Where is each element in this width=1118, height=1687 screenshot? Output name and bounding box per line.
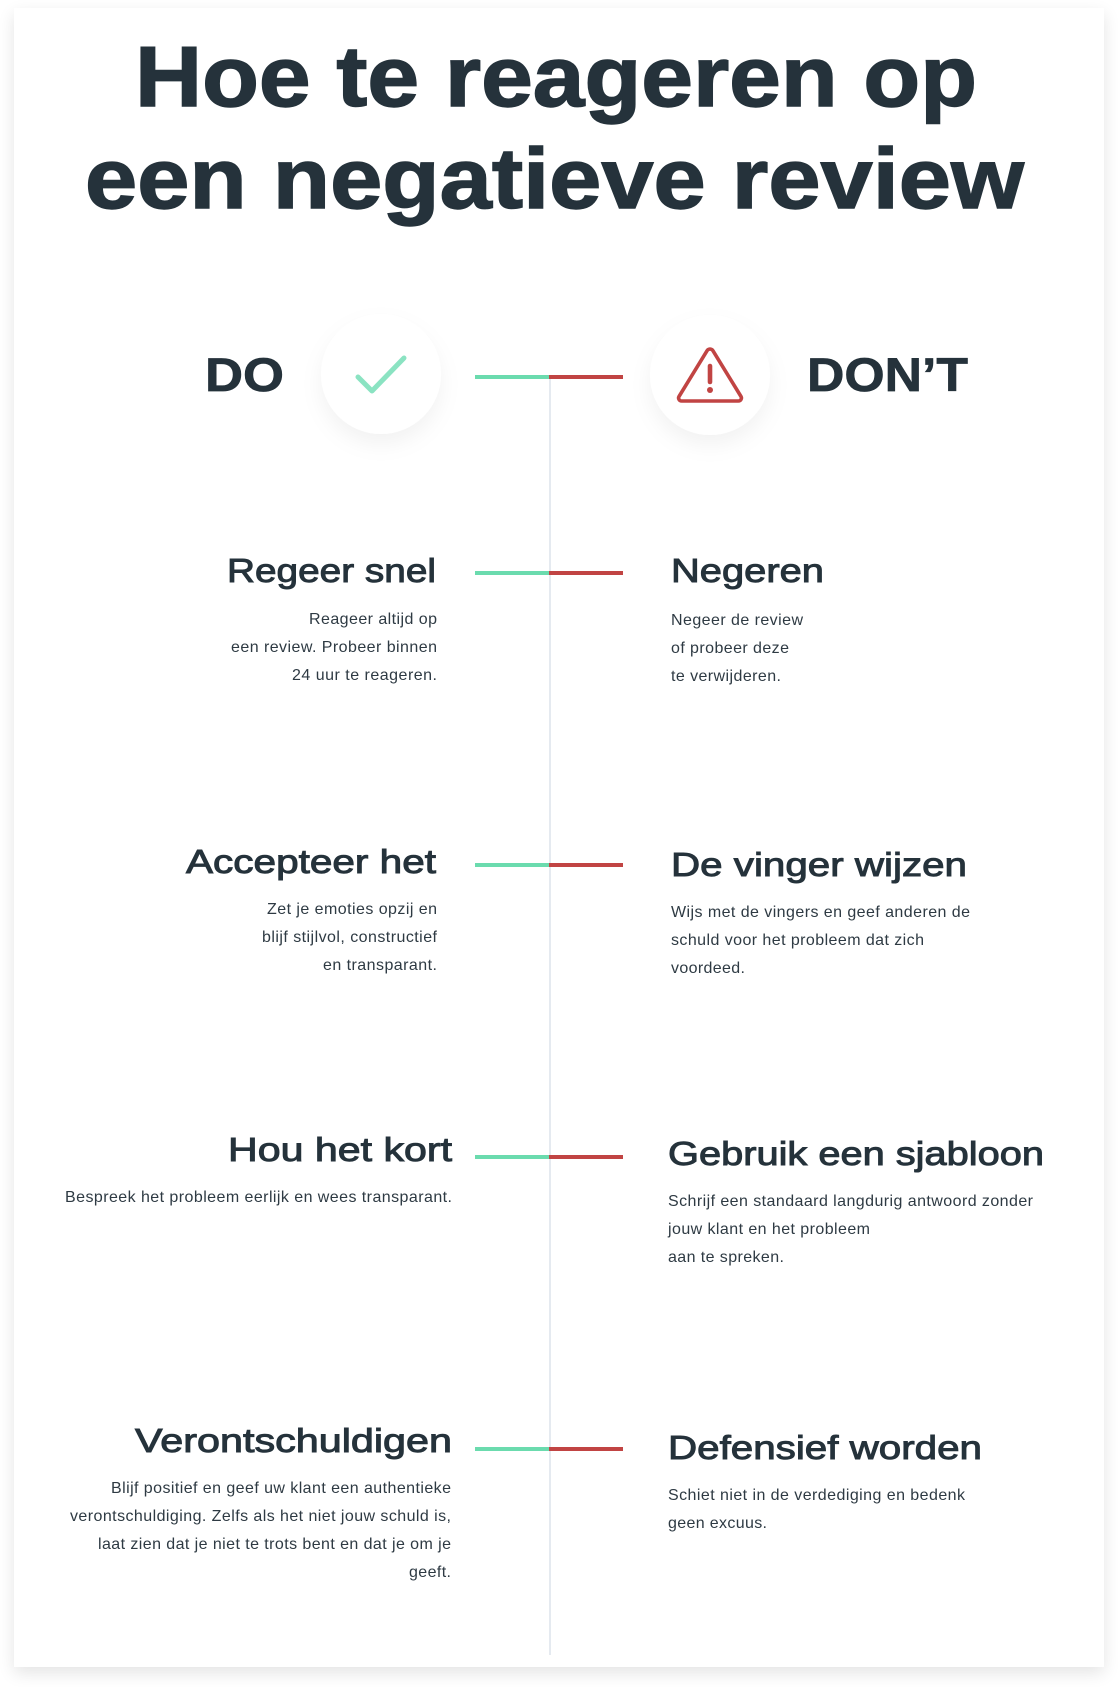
do 1: Regeer snel: Regeer snel [227, 553, 436, 590]
center timeline [549, 379, 551, 1655]
dont 3: Gebruik een sjabloon: aan te spreken. [668, 1249, 784, 1266]
do 2: Accepteer het: en transparant. [323, 957, 437, 974]
dont 3: Gebruik een sjabloon: Gebruik een sjabloon [668, 1136, 1044, 1173]
dont 3: Gebruik een sjabloon: jouw klant en het probleem [667, 1221, 870, 1238]
heading: DON'T: DON’T [807, 348, 968, 401]
do 4: Verontschuldigen: Verontschuldigen [135, 1423, 452, 1460]
title: Hoe te reageren op [135, 30, 977, 125]
dont 4: Defensief worden: Schiet niet in de verdediging en bedenk [668, 1487, 966, 1504]
dont 3: Gebruik een sjabloon: Schrijf een standaard langdurig antwoord zonder [668, 1193, 1034, 1210]
dont 2: De vinger wijzen: schuld voor het probleem dat zich [671, 932, 924, 949]
do 2: Accepteer het: blijf stijlvol, constructief [262, 929, 438, 946]
row 4 connector [475, 1447, 623, 1451]
row 2 connector [475, 863, 623, 867]
icon: check mark in circle [321, 314, 441, 434]
do 4: Verontschuldigen: Blijf positief en geef uw klant een authentieke [111, 1480, 451, 1497]
dont 2: De vinger wijzen: Wijs met de vingers en geef anderen de [671, 904, 970, 921]
do 1: Regeer snel: 24 uur te reageren. [292, 667, 437, 684]
do 2: Accepteer het: Accepteer het [186, 844, 437, 881]
icon: warning triangle in circle [650, 315, 770, 435]
row 3 connector [475, 1155, 623, 1159]
do 4: Verontschuldigen: verontschuldiging. Zelfs als het niet jouw schuld is, [70, 1508, 451, 1525]
dont 4: Defensief worden: Defensief worden [668, 1430, 982, 1467]
do 4: Verontschuldigen: laat zien dat je niet te trots bent en dat je om je [98, 1536, 451, 1553]
row 1 connector [475, 571, 623, 575]
do 1: Regeer snel: een review. Probeer binnen [231, 639, 437, 656]
do 3: Hou het kort: Bespreek het probleem eerlijk en wees transparant. [65, 1189, 452, 1206]
dont 1: Negeren: Negeren [671, 553, 824, 590]
do 2: Accepteer het [186, 844, 438, 974]
heading: DO: DO [205, 348, 284, 401]
dont 2: De vinger wijzen: voordeed. [671, 960, 745, 977]
title: een negatieve review [85, 132, 1025, 227]
dont 1: Negeren: te verwijderen. [671, 668, 781, 685]
dont 2: De vinger wijzen [671, 847, 970, 977]
do 4: Verontschuldigen [70, 1423, 452, 1581]
dont 2: De vinger wijzen: De vinger wijzen [671, 847, 967, 884]
dont 1: Negeren [671, 553, 824, 685]
dont 1: Negeren: Negeer de review [671, 612, 803, 629]
title [85, 30, 1025, 227]
do 1: Regeer snel [227, 553, 437, 684]
do 1: Regeer snel: Reageer altijd op [309, 611, 437, 628]
dont 4: Defensief worden: geen excuus. [668, 1515, 767, 1532]
dont 3: Gebruik een sjabloon [667, 1136, 1044, 1266]
do 2: Accepteer het: Zet je emoties opzij en [267, 901, 437, 918]
do 3: Hou het kort: Hou het kort [228, 1132, 453, 1169]
do 3: Hou het kort [65, 1132, 453, 1206]
dont 4: Defensief worden [668, 1430, 982, 1532]
do 4: Verontschuldigen: geeft. [409, 1564, 451, 1581]
dont 1: Negeren: of probeer deze [671, 640, 789, 657]
header connector [475, 375, 623, 379]
